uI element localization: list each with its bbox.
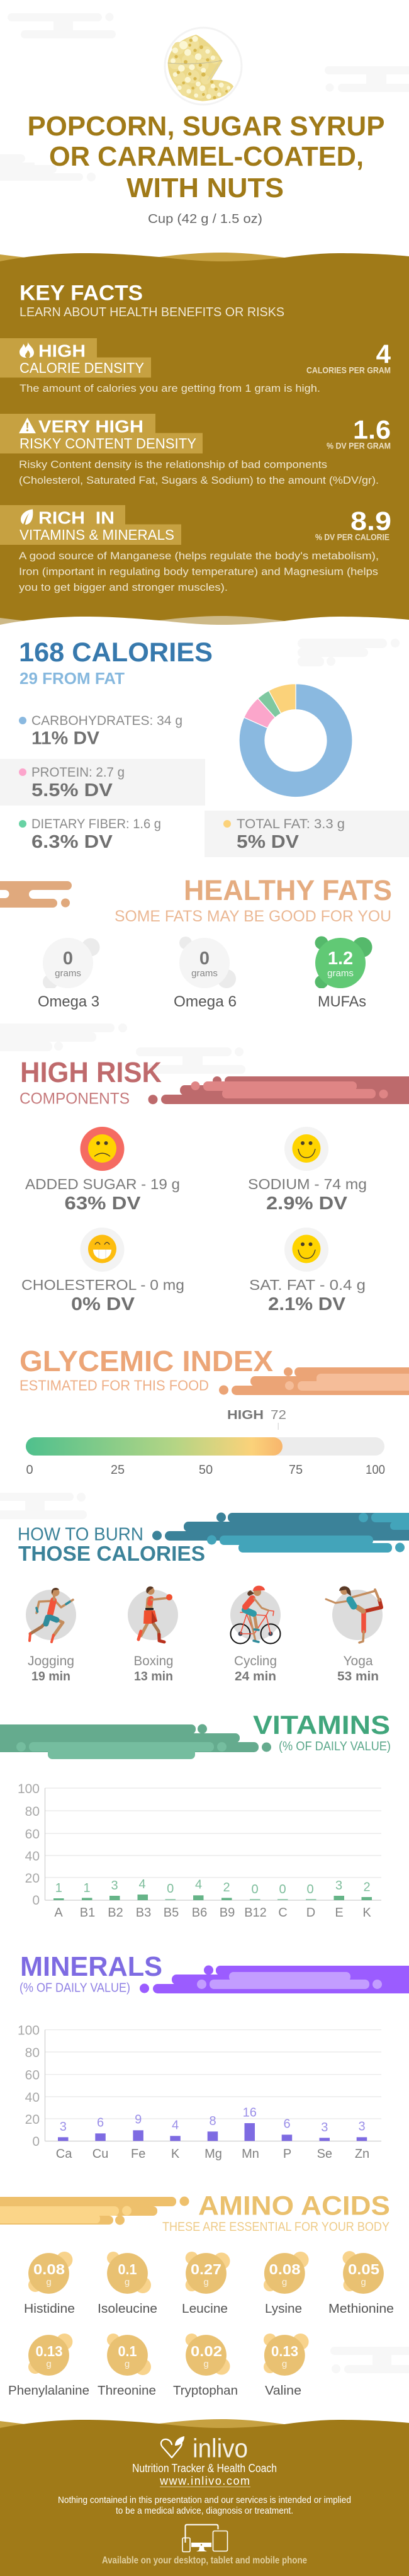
item: histidine: Histidine [24, 2302, 75, 2316]
value: high 72: 72 [271, 1408, 286, 1422]
icon: devices [182, 2524, 228, 2552]
chart: vitamins bar chart: 3 [335, 1879, 342, 1893]
label: calorie density: CALORIE DENSITY [20, 360, 144, 376]
icon: yoga pose [326, 1586, 381, 1643]
heading: key facts: KEY FACTS [20, 281, 143, 305]
axis: glycemic scale labels: 25 [111, 1463, 125, 1477]
chart: minerals bar chart: 80 [25, 2046, 40, 2060]
chart: vitamins bar chart: 60 [25, 1827, 40, 1842]
item: added sugar [25, 1127, 180, 1214]
chart: minerals bar chart: Zn [355, 2147, 369, 2161]
value: percent dv per calorie: 8.9 [350, 506, 391, 535]
axis: glycemic scale labels: 75 [289, 1463, 303, 1477]
tagline: Nutrition Tracker & Health Coach [132, 2462, 277, 2475]
serving size: Cup (42 g / 1.5 oz) [148, 212, 262, 226]
item: methionine: 0.05 [348, 2261, 379, 2277]
item: isoleucine [98, 2252, 157, 2316]
item: omega 3: 0 [63, 949, 73, 969]
legend: carbohydrates: CARBOHYDRATES: 34 g [31, 714, 182, 728]
item: lysine: Lysine [265, 2302, 302, 2316]
chart: vitamins bar chart: D [306, 1906, 315, 1920]
item: omega 3 [38, 938, 99, 1010]
value: percent dv per gram: 1.6 [353, 414, 391, 444]
chart: vitamins bar chart: E [335, 1906, 344, 1920]
item: omega 3: grams [55, 968, 81, 979]
legend: dietary fiber [19, 817, 161, 852]
item: omega 6 [174, 937, 237, 1010]
description: The amount of calories you are getting from 1 gram is high. [20, 383, 320, 394]
chart: minerals bar chart: Fe [131, 2147, 145, 2161]
banner: glycemic index [219, 1367, 409, 1395]
chart: minerals bar chart: 40 [25, 2090, 40, 2105]
chart: minerals bar chart: K [171, 2147, 180, 2161]
heading: high risk: HIGH RISK [20, 1056, 162, 1088]
banner: minerals [140, 1965, 409, 1993]
chart: minerals bar chart: Mg [204, 2147, 222, 2161]
legend: carbohydrates: 11% DV [31, 729, 100, 749]
item: cholesterol: 0% DV [71, 1294, 135, 1314]
panel: how to burn those calories [18, 1513, 409, 1684]
item: valine: g [282, 2359, 287, 2369]
legend: carbohydrates [19, 714, 182, 749]
item: added sugar: 63% DV [64, 1194, 141, 1214]
icon: boxer [138, 1587, 172, 1642]
item: valine [264, 2334, 309, 2398]
banner: burn calories [152, 1513, 409, 1553]
chart: vitamins bar chart: 100 [18, 1782, 40, 1796]
activity: jogging: 19 min [31, 1670, 70, 1684]
chart: vitamins bar chart: B1 [80, 1906, 95, 1920]
value: calories per gram: 4 [376, 339, 391, 368]
chart: vitamins bar chart: B2 [108, 1906, 123, 1920]
description [19, 550, 379, 593]
panel: glycemic index [20, 1345, 409, 1477]
chart: minerals bar chart: 8 [209, 2114, 216, 2128]
panel: healthy fats [0, 874, 392, 1010]
item: sodium [248, 1127, 367, 1214]
chart: vitamins bar chart: 1 [55, 1881, 62, 1895]
chart: glycemic scale bar [26, 1437, 384, 1456]
activity: jogging: Jogging [28, 1654, 74, 1668]
chart: minerals bar chart: 60 [25, 2068, 40, 2083]
label: vitamins and minerals: VITAMINS & MINERALS [20, 527, 174, 543]
chart: minerals bar chart [18, 2024, 381, 2161]
chart: minerals bar chart: 16 [243, 2106, 257, 2120]
label: very high: VERY HIGH [38, 416, 143, 436]
panel: vitamins [0, 1710, 391, 1920]
label: rich in: RICH IN [38, 508, 115, 527]
value: high 72 [227, 1408, 286, 1422]
legend: dietary fiber: DIETARY FIBER: 1.6 g [31, 817, 161, 831]
chart: vitamins bar chart: 4 [138, 1878, 146, 1891]
chart: vitamins bar chart: 0 [306, 1883, 314, 1896]
item: saturated fat: SAT. FAT - 0.4 g [249, 1277, 366, 1293]
chart: vitamins bar chart: A [54, 1906, 63, 1920]
item: tryptophan [173, 2334, 238, 2398]
item: saturated fat [249, 1228, 366, 1314]
subheading: components: COMPONENTS [20, 1090, 130, 1108]
banner: amino acids [0, 2197, 189, 2225]
item: leucine: Leucine [182, 2302, 228, 2316]
activity: yoga [326, 1586, 383, 1684]
item: omega 3: Omega 3 [38, 993, 99, 1010]
banner: healthy fats [0, 881, 72, 908]
title: OR CARAMEL-COATED, [49, 141, 364, 172]
item: leucine: g [203, 2277, 209, 2288]
item: leucine: 0.27 [191, 2261, 221, 2277]
item: sodium: SODIUM - 74 mg [248, 1176, 367, 1192]
fact: very high risky content density [0, 414, 391, 486]
chart: minerals bar chart: P [283, 2147, 291, 2161]
activity: cycling [230, 1586, 281, 1684]
icon: jogger [30, 1588, 73, 1642]
item: mufas: 1.2 [328, 949, 353, 969]
chart: vitamins bar chart: 20 [25, 1871, 40, 1886]
item: mufas: grams [327, 968, 354, 979]
item: omega 6: grams [191, 968, 218, 979]
description: (Cholesterol, Saturated Fat, Sugars & Sodium) to the amount (%DV/gr). [19, 475, 379, 486]
chart: minerals bar chart: Se [317, 2147, 332, 2161]
legend: total fat: 5% DV [237, 832, 300, 852]
chart: vitamins bar chart: 1 [83, 1881, 91, 1895]
chart: vitamins bar chart: 0 [251, 1883, 259, 1896]
item: isoleucine: g [125, 2277, 130, 2288]
heading: 168 calories: 168 CALORIES [19, 638, 213, 668]
subheading: healthy fats: SOME FATS MAY BE GOOD FOR YOU [115, 908, 391, 925]
chart: vitamins bar chart: 0 [32, 1893, 40, 1908]
legend: total fat [223, 817, 345, 852]
chart: vitamins bar chart: B5 [164, 1906, 179, 1920]
icon: sad face [81, 1127, 125, 1171]
item: sodium: 2.9% DV [266, 1194, 348, 1214]
item: phenylalanine [8, 2334, 89, 2398]
fact: high calorie density [0, 338, 391, 394]
chart: vitamins bar chart: B3 [136, 1906, 151, 1920]
item: cholesterol [21, 1228, 184, 1314]
value: high 72: HIGH [227, 1408, 264, 1422]
chart: minerals bar chart: 4 [172, 2119, 179, 2133]
description: Iron (important in regulating body temperature) and Magnesium (helps [19, 566, 378, 578]
icon: leaf [21, 509, 33, 525]
panel: minerals [18, 1951, 409, 2161]
subheading: percent of daily value: (% OF DAILY VALUE) [279, 1740, 391, 1753]
chart: minerals bar chart: 3 [358, 2120, 366, 2134]
availability note: Available on your desktop, tablet and mobile phone [102, 2555, 307, 2566]
label: high: HIGH [38, 341, 86, 360]
chart: minerals bar chart: 9 [135, 2113, 142, 2127]
unit: percent dv per gram: % DV PER GRAM [327, 441, 391, 451]
item: tryptophan: g [203, 2359, 209, 2369]
activity: boxing [128, 1587, 178, 1684]
subheading: estimated: ESTIMATED FOR THIS FOOD [20, 1377, 209, 1394]
chart: vitamins bar chart: 2 [363, 1881, 371, 1895]
label: risky content density: RISKY CONTENT DENSITY [20, 435, 196, 452]
icon: flame [20, 341, 34, 358]
chart: vitamins bar chart: 80 [25, 1804, 40, 1819]
heading: vitamins: VITAMINS [253, 1710, 390, 1740]
chart: vitamins bar chart: 40 [25, 1849, 40, 1864]
item: threonine [98, 2334, 156, 2398]
axis: glycemic scale labels: 0 [26, 1463, 33, 1477]
item: lysine: 0.08 [269, 2261, 301, 2277]
legend: protein: PROTEIN: 2.7 g [31, 765, 125, 780]
item: phenylalanine: Phenylalanine [8, 2384, 89, 2398]
chart: minerals bar chart: 0 [32, 2134, 40, 2149]
chart: vitamins bar chart: 2 [223, 1881, 230, 1895]
item: lysine [264, 2252, 309, 2316]
activity: boxing: 13 min [134, 1670, 173, 1684]
item: phenylalanine: 0.13 [35, 2343, 63, 2359]
item: isoleucine: 0.1 [118, 2261, 137, 2277]
panel: key facts [0, 253, 409, 630]
item: phenylalanine: g [46, 2359, 52, 2369]
chart: minerals bar chart: 6 [283, 2117, 291, 2131]
title: POPCORN, SUGAR SYRUP [28, 111, 385, 142]
legend: dietary fiber: 6.3% DV [31, 832, 113, 852]
chart: vitamins bar chart: 4 [195, 1878, 202, 1892]
chart: minerals bar chart: 100 [18, 2024, 40, 2038]
subheading: key facts: LEARN ABOUT HEALTH BENEFITS OR RISKS [20, 305, 284, 319]
item: leucine [182, 2252, 230, 2316]
chart: minerals bar chart: 20 [25, 2112, 40, 2127]
logo: inlivo: inlivo [193, 2434, 248, 2463]
heading: those calories: THOSE CALORIES [18, 1542, 205, 1566]
panel: amino acids [0, 2191, 394, 2398]
heading: healthy fats: HEALTHY FATS [184, 874, 392, 906]
item: saturated fat: 2.1% DV [268, 1294, 346, 1314]
description: A good source of Manganese (helps regulate the body's metabolism), [19, 550, 379, 562]
chart: vitamins bar chart: 3 [111, 1879, 118, 1893]
disclaimer [58, 2495, 351, 2516]
panel: high risk components [20, 1056, 409, 1314]
chart: minerals bar chart: 6 [97, 2116, 104, 2130]
activity: jogging [26, 1588, 76, 1684]
item: isoleucine: Isoleucine [98, 2302, 157, 2316]
subheading: 29 from fat: 29 FROM FAT [20, 669, 125, 688]
item: mufas [315, 936, 373, 1010]
icon: cyclist [230, 1586, 281, 1644]
item: valine: Valine [265, 2384, 301, 2398]
item: threonine: g [125, 2359, 130, 2369]
legend: total fat: TOTAL FAT: 3.3 g [237, 817, 345, 831]
activity: yoga: 53 min [337, 1670, 379, 1684]
item: threonine: Threonine [98, 2384, 156, 2398]
activity: yoga: Yoga [344, 1654, 373, 1668]
item: methionine: Methionine [328, 2302, 394, 2316]
icon: smiling face [284, 1228, 328, 1272]
axis: glycemic scale labels: 100 [366, 1463, 385, 1477]
chart: vitamins bar chart: B6 [192, 1906, 207, 1920]
food image: bowl of popcorn [165, 28, 242, 105]
chart: vitamins bar chart: B12 [244, 1906, 267, 1920]
item: valine: 0.13 [271, 2343, 298, 2359]
panel: calories [0, 638, 409, 857]
legend: protein: 5.5% DV [31, 780, 113, 801]
website: www.inlivo.com [159, 2475, 250, 2487]
heading: minerals: MINERALS [20, 1951, 162, 1982]
item: tryptophan: Tryptophan [173, 2384, 238, 2398]
item: omega 6: 0 [199, 949, 210, 969]
item: methionine: g [361, 2277, 366, 2288]
chart: vitamins bar chart: B9 [220, 1906, 235, 1920]
axis: glycemic scale labels [26, 1463, 385, 1477]
banner: high risk [148, 1076, 409, 1104]
icon: grinning face [81, 1228, 125, 1272]
chart: vitamins bar chart [18, 1782, 381, 1920]
title: WITH NUTS [126, 173, 284, 203]
description: Risky Content density is the relationship of bad components [19, 459, 327, 470]
item: added sugar: ADDED SUGAR - 19 g [25, 1176, 180, 1192]
fact: rich in vitamins and minerals [0, 505, 391, 593]
chart: minerals bar chart: Mn [242, 2147, 259, 2161]
chart: vitamins bar chart: C [278, 1906, 288, 1920]
chart: minerals bar chart: Ca [56, 2147, 72, 2161]
panel: footer [0, 2419, 409, 2576]
banner: vitamins [0, 1724, 271, 1759]
logo: inlivo [161, 2434, 248, 2463]
heading: amino acids: AMINO ACIDS [198, 2191, 390, 2221]
description: you to get bigger and stronger muscles). [19, 582, 228, 593]
heading: glycemic index: GLYCEMIC INDEX [20, 1345, 273, 1377]
chart: vitamins bar chart: 0 [167, 1882, 174, 1896]
description [19, 459, 379, 486]
chart: vitamins bar chart: 0 [279, 1883, 286, 1896]
item: methionine [328, 2251, 394, 2316]
unit: calories per gram: CALORIES PER GRAM [306, 365, 391, 375]
item: histidine: 0.08 [33, 2261, 65, 2277]
item: histidine [24, 2252, 75, 2316]
activity: cycling: Cycling [234, 1654, 277, 1668]
axis: glycemic scale labels: 50 [199, 1463, 213, 1477]
item: threonine: 0.1 [118, 2343, 137, 2359]
icon: warning triangle [19, 418, 36, 433]
subheading: essential: THESE ARE ESSENTIAL FOR YOUR BODY [162, 2220, 389, 2234]
chart: macronutrient donut [239, 684, 352, 797]
heading: how to burn: HOW TO BURN [18, 1525, 143, 1545]
unit: percent dv per calorie: % DV PER CALORIE [315, 532, 389, 542]
icon: smiling face [284, 1127, 328, 1171]
item: histidine: g [46, 2277, 52, 2288]
item: cholesterol: CHOLESTEROL - 0 mg [21, 1277, 184, 1293]
item: mufas: MUFAs [318, 993, 366, 1010]
disclaimer: Nothing contained in this presentation and our services is intended or implied [58, 2495, 351, 2505]
chart: minerals bar chart: Cu [92, 2147, 108, 2161]
disclaimer: to be a medical advice, diagnosis or treatment. [116, 2505, 293, 2516]
item: lysine: g [282, 2277, 287, 2288]
chart: minerals bar chart: 3 [60, 2120, 67, 2134]
title [28, 111, 385, 203]
chart: vitamins bar chart: K [362, 1906, 371, 1920]
activity: cycling: 24 min [235, 1670, 276, 1684]
activity: boxing: Boxing [133, 1654, 174, 1668]
chart: minerals bar chart: 3 [321, 2121, 328, 2134]
legend: protein [19, 765, 125, 801]
item: tryptophan: 0.02 [191, 2343, 222, 2359]
subheading: percent of daily value: (% OF DAILY VALUE) [20, 1981, 130, 1995]
item: omega 6: Omega 6 [174, 993, 237, 1010]
